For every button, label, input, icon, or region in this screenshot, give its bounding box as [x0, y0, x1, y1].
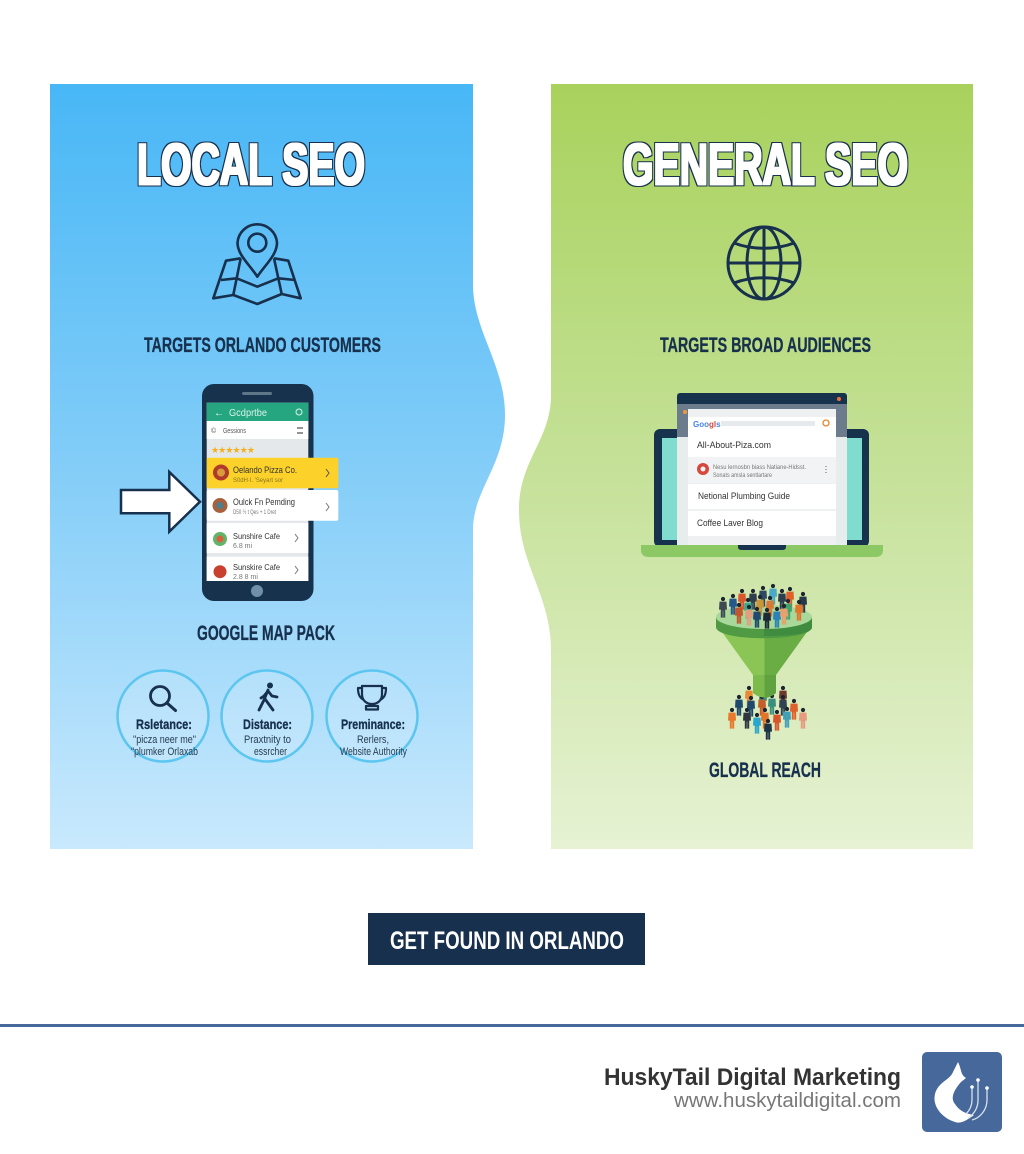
factor: prominence: Rerlers, [357, 734, 389, 746]
phone with map pack: Gessions [223, 428, 246, 435]
card: sunshine cafe [207, 523, 308, 553]
result row: all about pizza: All-About-Piza.com [697, 440, 771, 451]
result row: coffee lover blog: Coffee Laver Blog [697, 518, 763, 528]
phone with map pack: © [211, 427, 217, 435]
card: sunshine cafe lower [207, 557, 308, 581]
heading: google map pack: GOOGLE MAP PACK [197, 621, 335, 645]
heading: targets broad audiences: TARGETS BROAD AUDIENCES [660, 333, 871, 357]
panel: local seo [50, 84, 505, 849]
phone with map pack [202, 384, 338, 601]
card: orlando pizza co: S0dH·I. 'Seyart sor [233, 477, 284, 484]
icon: globe [728, 227, 800, 299]
factor: prominence [326, 670, 418, 762]
icon: map pin [213, 224, 301, 304]
result row: coffee lover blog [688, 511, 836, 536]
button: get found in orlando [368, 913, 645, 965]
title: local seo: LOCAL SEO [137, 133, 365, 198]
card: orlando pizza co: Oelando Pizza Co. [233, 465, 297, 475]
result row: national plumbing guide [688, 484, 836, 509]
funnel with crowd [716, 584, 812, 740]
footer brand name: HuskyTail Digital Marketing [604, 1064, 901, 1091]
factor: distance [222, 670, 312, 762]
card: orlando pizza co [207, 458, 338, 488]
star rating: ★★★★★★ [211, 445, 255, 455]
laptop with search results: Googls [693, 420, 721, 429]
card: quick fix plumbing [207, 490, 338, 521]
card: quick fix plumbing: Oulck Fn Pemding [233, 497, 295, 507]
factor: distance: Praxtnity to [244, 734, 291, 746]
result row: national plumbing guide: Netional Plumbing Guide [698, 491, 790, 501]
footer divider [0, 1024, 1024, 1027]
footer url: www.huskytaildigital.com [673, 1090, 901, 1112]
factor: relevance: "plumker Orlaxab [131, 746, 198, 758]
logo [922, 1052, 1002, 1132]
card: sunshine cafe: Sunshire Cafe [233, 531, 280, 541]
heading: global reach: GLOBAL REACH [709, 758, 821, 782]
factor: distance: Distance: [243, 716, 292, 732]
card: sunshine cafe lower: 2.8 8 mi [233, 574, 258, 581]
factor: relevance: Rsletance: [136, 716, 192, 732]
panel: general seo [519, 84, 973, 849]
card: sunshine cafe lower: Sunskire Cafe [233, 562, 280, 572]
factor: distance: essrcher [254, 746, 287, 758]
factor: relevance: "picza neer me" [133, 734, 196, 746]
result row: snippet: Sonats amsla sentlartare [713, 473, 773, 479]
heading: targets orlando customers: TARGETS ORLANDO CUSTOMERS [144, 333, 381, 357]
phone with map pack: ← [214, 408, 224, 419]
result row: snippet [688, 457, 836, 483]
arrow [121, 472, 200, 532]
result row: snippet: Nesu lernosbn biass Natiane-Hidsst. [713, 465, 806, 471]
crowd below funnel [728, 695, 807, 740]
phone with map pack: Gcdprtbe [229, 408, 267, 419]
factor: relevance [118, 670, 208, 762]
factor: prominence: Preminance: [341, 716, 405, 732]
crowd falling out [745, 686, 787, 717]
result row: all about pizza [688, 429, 836, 457]
factor: prominence: Website Authority [340, 746, 407, 758]
crowd in funnel [719, 584, 807, 629]
card: quick fix plumbing: D50 ½ t Qes + 1 Dret [233, 508, 276, 516]
laptop with search results [641, 393, 883, 557]
button: get found in orlando: GET FOUND IN ORLANDO [390, 927, 624, 955]
card: sunshine cafe: 6.8 mi [233, 543, 253, 550]
